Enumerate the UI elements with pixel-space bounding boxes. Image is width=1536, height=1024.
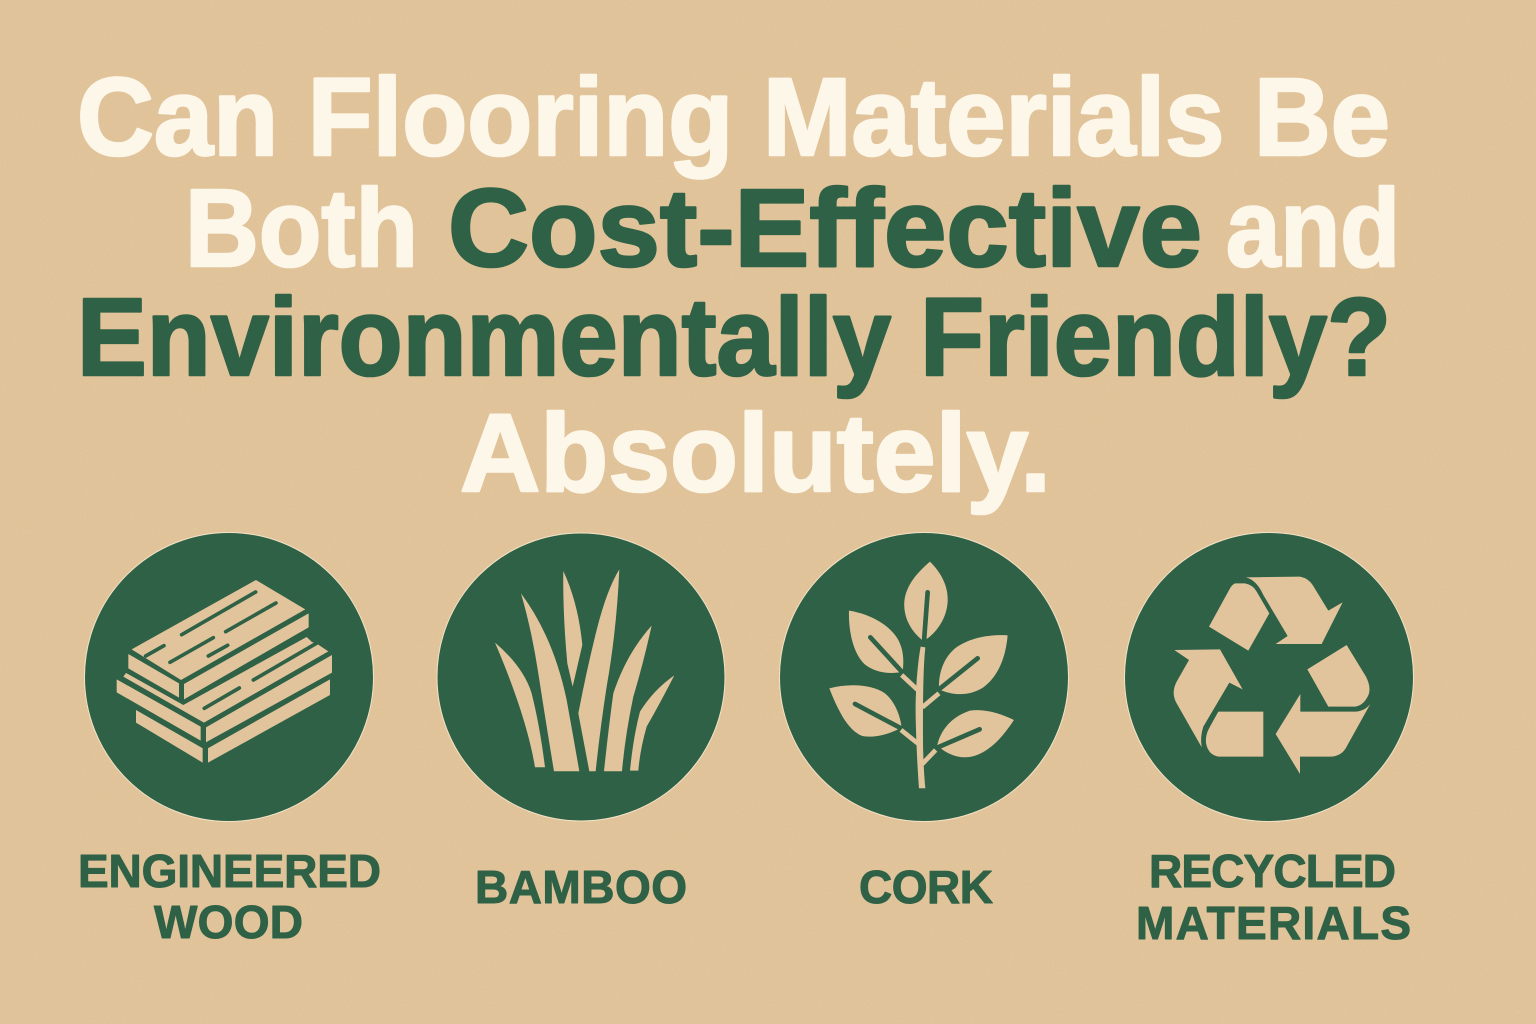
icon: bamboo	[437, 533, 725, 821]
label: engineered wood	[78, 845, 381, 948]
title line 2: Cost-Effective: Cost-Effective	[448, 167, 1202, 290]
title line 1: Can Flooring Materials Be	[77, 56, 1390, 179]
title line 2: Both: Both	[185, 167, 418, 290]
label: cork: CORK	[859, 861, 993, 913]
label: engineered wood: WOOD	[154, 896, 303, 948]
label: recycled materials	[1136, 845, 1411, 949]
label: recycled materials: MATERIALS	[1136, 897, 1411, 949]
label: bamboo: BAMBOO	[475, 861, 687, 913]
label: recycled materials: RECYCLED	[1149, 845, 1396, 897]
title	[77, 56, 1400, 515]
title line 4: Absolutely.	[460, 392, 1051, 515]
title line 3: Environmentally Friendly?	[77, 276, 1391, 399]
icon: cork branch with leaves	[780, 532, 1068, 822]
icon: engineered wood planks	[84, 532, 374, 822]
label: engineered wood: ENGINEERED	[78, 845, 381, 897]
title line 2: and: and	[1226, 167, 1400, 290]
icon: recycling symbol	[1124, 532, 1414, 822]
